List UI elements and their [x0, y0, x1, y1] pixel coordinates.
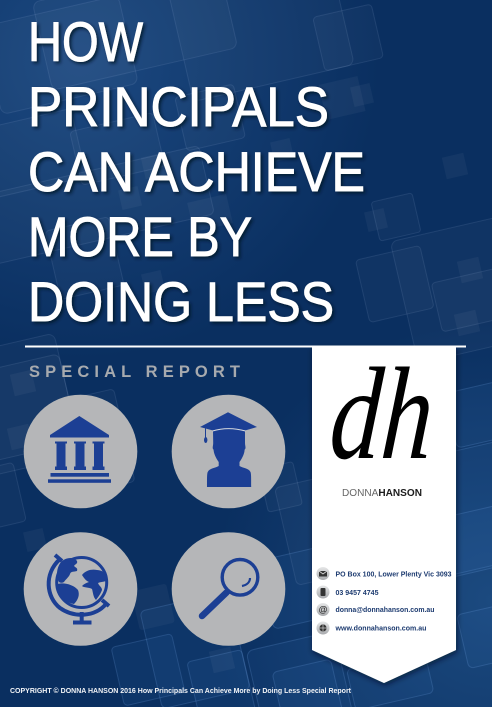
contact: email	[316, 603, 435, 616]
contact: email: donna@donnahanson.com.au	[336, 605, 435, 614]
contact: phone: 03 9457 4745	[336, 588, 379, 597]
title: DOING LESS	[28, 270, 334, 333]
contact: postal address: PO Box 100, Lower Plenty Vic 3093	[336, 570, 452, 578]
title: MORE BY	[28, 205, 252, 268]
icon: magnifying glass	[172, 532, 285, 646]
logo name: DONNAHANSON	[342, 488, 422, 499]
banner	[312, 341, 456, 683]
title: PRINCIPALS	[28, 75, 329, 138]
contact: website: www.donnahanson.com.au	[335, 624, 427, 632]
divider rule	[25, 346, 466, 348]
logo monogram: dh	[326, 341, 438, 487]
contact: email: @	[319, 604, 328, 614]
title: CAN ACHIEVE	[28, 140, 365, 203]
contact: postal address	[316, 567, 452, 580]
title: HOW	[28, 10, 143, 73]
footer copyright: COPYRIGHT © DONNA HANSON 2016 How Principals Can Achieve More by Doing Less Special Report	[10, 687, 352, 695]
icon: institution building	[24, 395, 137, 508]
subtitle: SPECIAL REPORT	[29, 363, 240, 381]
icon: graduate	[172, 395, 285, 508]
title	[28, 10, 365, 333]
icon: globe	[24, 532, 137, 646]
contact: phone	[316, 586, 379, 598]
contact: website	[316, 622, 427, 634]
